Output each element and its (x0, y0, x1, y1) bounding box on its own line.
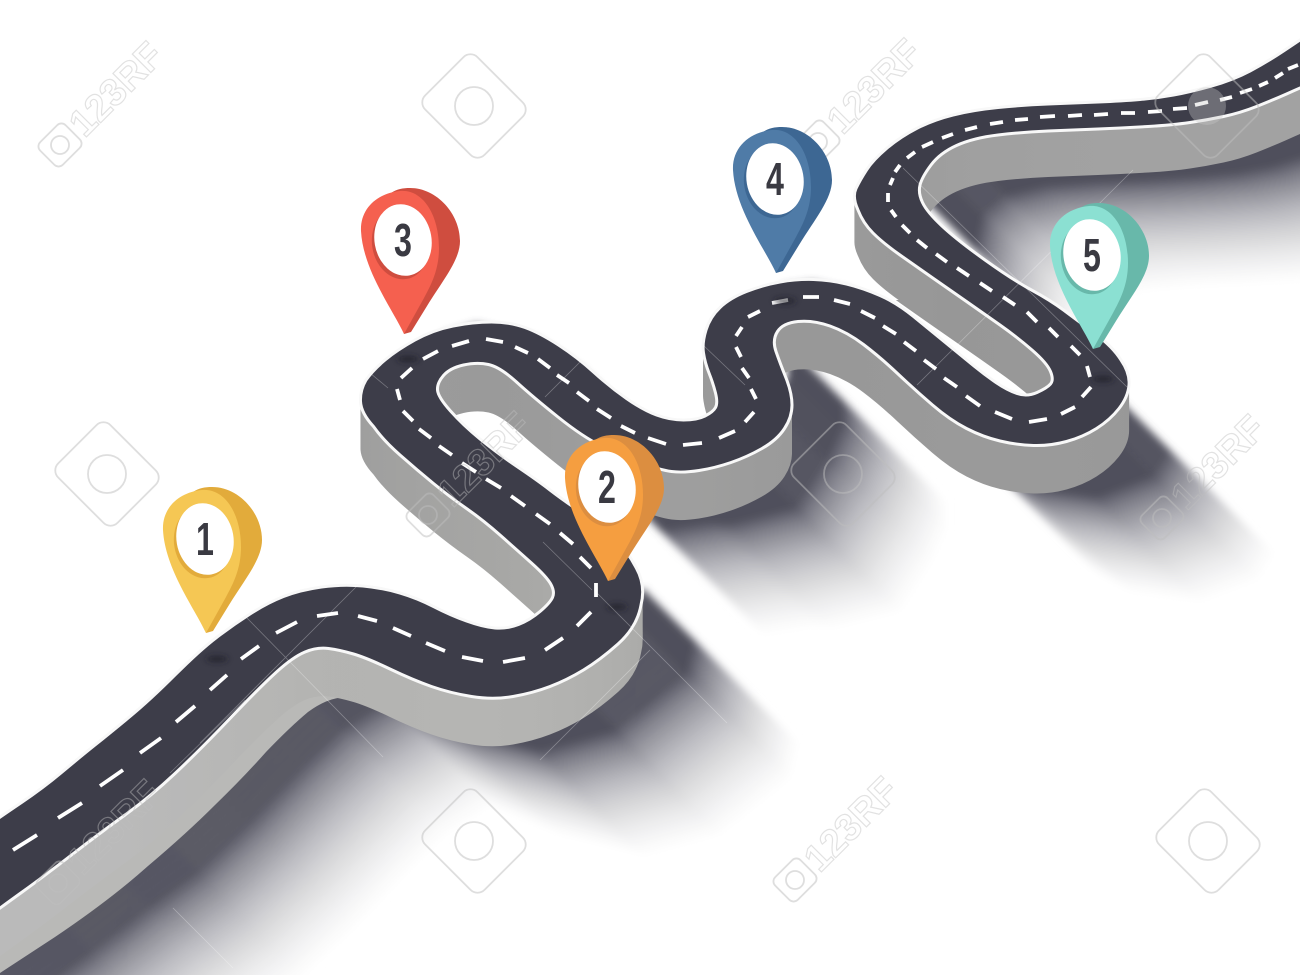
watermark: top 3: 123RF (819, 32, 930, 142)
pin 5: teal: 5 (1083, 230, 1101, 281)
pin 5: teal (1050, 203, 1149, 349)
watermark: top stamp 4 (1151, 50, 1263, 162)
pin 3: red: 3 (394, 215, 412, 266)
watermark: middle stamp 3 (787, 418, 899, 530)
watermark: middle 4 (1135, 408, 1274, 546)
pin contact shadows (206, 298, 1114, 662)
watermark: bottom 1: 123RF (59, 773, 170, 883)
watermark: bottom 1 (31, 773, 170, 911)
watermark: middle 2: 123RF (429, 405, 540, 515)
pin 1: yellow: 1 (196, 514, 214, 565)
watermark: top 3 (791, 32, 930, 170)
watermark: middle stamp 1 (51, 418, 163, 530)
pin 3: red (361, 188, 460, 334)
watermark: middle 4: 123RF (1163, 408, 1274, 518)
pin 2: orange: 2 (598, 462, 616, 513)
center dashed line (13, 65, 1298, 850)
watermark: top left: 123RF (61, 35, 172, 145)
watermark: top stamp 2 (418, 50, 530, 162)
watermark: top left (33, 35, 172, 173)
watermark: bottom 3 (768, 770, 907, 908)
watermark: middle 2 (401, 405, 540, 543)
pin 4: blue: 4 (766, 154, 784, 205)
watermark: bottom stamp 2 (418, 785, 530, 897)
pin 4: blue (733, 127, 832, 273)
taller wall on the near left section (0, 640, 345, 975)
pin 2: orange (565, 435, 664, 581)
watermark: bottom 3: 123RF (796, 770, 907, 880)
pin 1: yellow (163, 487, 262, 633)
watermark: bottom stamp 4 (1152, 785, 1264, 897)
